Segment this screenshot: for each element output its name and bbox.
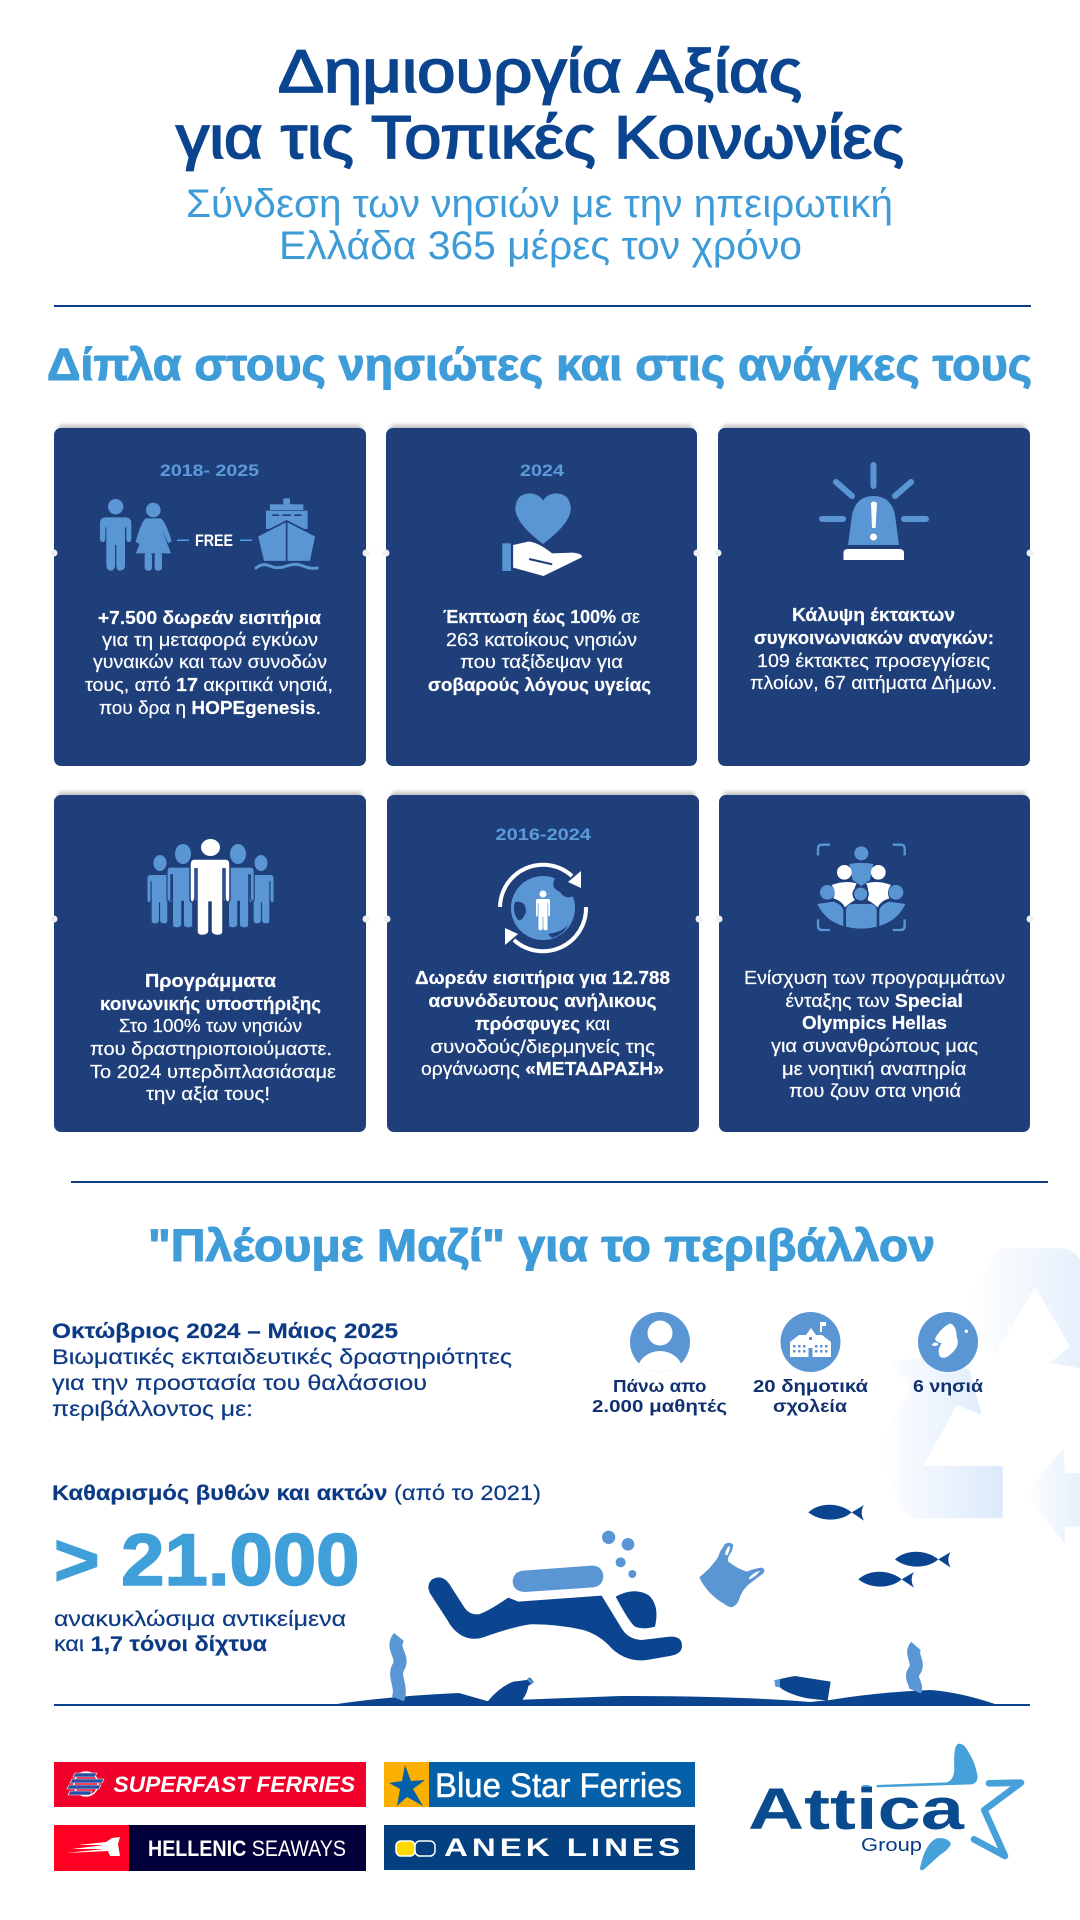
label: 2.000 μαθητές [592,1396,727,1416]
body text: πρόσφυγες και [475,1014,610,1034]
text block: educational activities [52,1320,512,1421]
illustration: diver and seabed [54,1505,1030,1706]
stat: schools [753,1312,868,1416]
body text [415,968,670,1079]
stat: islands [913,1312,983,1396]
big number: > 21.000 [54,1520,360,1601]
body text: Δωρεάν εισιτήρια για 12.788 [415,968,670,988]
seabed [54,1690,1030,1706]
body text: γυναικών και των συνοδών [93,652,327,672]
body text: που ταξίδεψαν για [460,652,623,672]
text: recyclables and nets: ανακυκλώσιμα αντικείμενα [54,1608,346,1631]
logo: Anek Lines [384,1825,695,1870]
text block: educational activities: Βιωματικές εκπαιδευτικές δραστηριότητες [52,1346,512,1369]
logo: Superfast Ferries: SUPERFAST FERRIES [114,1772,355,1797]
logo: Hellenic Seaways [54,1825,366,1871]
year: 2018- 2025 [160,461,259,480]
subtitle: Ελλάδα 365 μέρες τον χρόνο [279,224,802,268]
body text: Στο 100% των νησιών [119,1016,302,1036]
year: 2016-2024 [496,825,592,844]
label: σχολεία [773,1396,847,1416]
panel: emergency transport [714,425,1034,766]
body text [85,608,333,718]
body text: οργάνωσης «ΜΕΤΑΔΡΑΣΗ» [421,1059,664,1079]
watermark: recycling symbol [880,1248,1080,1544]
body text: Olympics Hellas [802,1013,947,1033]
logo: Hellenic Seaways: HELLENIC SEAWAYS [148,1836,346,1861]
body text: 109 έκτακτες προσεγγίσεις [757,651,990,671]
body text: Προγράμματα [145,971,276,991]
body text: Κάλυψη έκτακτων [792,605,955,625]
icon: school building [780,1312,840,1372]
body text: για τη μεταφορά εγκύων [102,630,318,650]
year: 2024 [520,461,565,480]
body text: ασυνόδευτους ανήλικους [428,991,656,1011]
body text: πλοίων, 67 αιτήματα Δήμων. [750,673,997,693]
logo: Blue Star Ferries: Blue Star Ferries [435,1767,682,1805]
logo: Blue Star Ferries [384,1762,695,1807]
body text: σοβαρούς λόγους υγείας [428,675,651,695]
subtitle [186,182,893,268]
logo: Attica Group: Group [861,1835,922,1855]
logo: Attica Group: Attica [748,1777,965,1842]
text block: educational activities: Οκτώβριος 2024 – Μάιος 2025 [52,1320,398,1343]
heading: next to islanders: Δίπλα στους νησιώτες και στις ανάγκες τους [47,339,1032,390]
label: 6 νησιά [913,1376,983,1396]
logo: Superfast Ferries [54,1762,366,1807]
body text: 263 κατοίκους νησιών [446,630,637,650]
logo: Attica Group [748,1744,1021,1870]
body text: συγκοινωνιακών αναγκών: [754,628,994,648]
panel: health discount [382,425,700,766]
body text: Το 2024 υπερδιπλασιάσαμε [90,1062,336,1082]
body text: που δρα η HOPEgenesis . [99,698,321,718]
body text: που ζουν στα νησιά [789,1081,961,1101]
plastic bag, bottle and fish [699,1505,951,1701]
body text: συνοδούς/διερμηνείς της [430,1037,655,1057]
body text [428,607,651,695]
icon: group in brackets [817,845,905,930]
panel: social support programmes [50,792,370,1132]
body text [744,968,1005,1101]
title: για τις Τοπικές Κοινωνίες [176,104,904,171]
seaweed [396,1637,916,1699]
icon: student [630,1312,690,1372]
title [176,38,904,171]
body text: για συνανθρώπους μας [771,1036,978,1056]
body text: Ενίσχυση των προγραμμάτων [744,968,1005,988]
body text: τους, από 17 ακριτικά νησιά, [85,675,333,695]
label [753,1376,868,1416]
stat: students [592,1312,727,1416]
icon: crowd of people [148,839,274,935]
body text [750,605,997,693]
body text: με νοητική αναπηρία [782,1059,966,1079]
panel: free tickets for pregnant women [50,425,370,766]
label [592,1376,727,1416]
icon: siren [822,465,926,560]
label: FREE: FREE [195,532,233,550]
diver [428,1531,682,1704]
body text: κοινωνικής υποστήριξης [100,994,321,1015]
label: Πάνω απο [613,1376,706,1396]
icon: globe with person [500,865,586,951]
body text: που δραστηριοποιούμαστε. [90,1039,332,1059]
icon: heart in hand [502,493,582,576]
icon: people, free, ship [100,498,317,571]
text block: educational activities: για την προστασία του θαλάσσιου [52,1372,427,1395]
text block: educational activities: περιβάλλοντος με: [52,1398,253,1421]
logo: Anek Lines: ANEK LINES [444,1834,684,1862]
heading: sailing together for the environment: "Πλέουμε Μαζί" για το περιβάλλον [148,1220,935,1271]
text: recyclables and nets [54,1608,346,1656]
panel: free tickets for refugee minors [384,792,702,1132]
text: seabed cleanups heading: Καθαρισμός βυθών και ακτών (από το 2021) [52,1482,541,1505]
panel: Special Olympics Hellas [716,792,1034,1132]
body text: Έκπτωση έως 100% σε [443,607,640,627]
body text: την αξία τους! [146,1084,270,1104]
body text: ένταξης των Special [786,991,963,1011]
title: Δημιουργία Αξίας [278,38,802,105]
label: 20 δημοτικά [753,1376,868,1396]
body text: +7.500 δωρεάν εισιτήρια [98,608,321,628]
subtitle: Σύνδεση των νησιών με την ηπειρωτική [186,182,893,226]
icon: island [918,1312,978,1372]
body text [90,971,336,1104]
text: recyclables and nets: και 1,7 τόνοι δίχτυα [54,1633,267,1656]
